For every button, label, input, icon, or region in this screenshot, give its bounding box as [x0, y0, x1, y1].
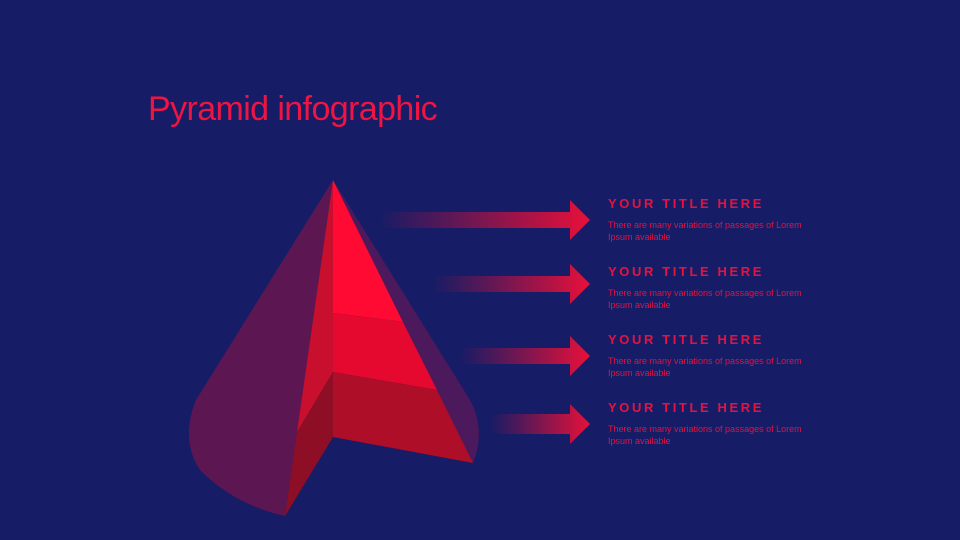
- item 2 text: There are many variations of passages of Lorem Ipsum available: [608, 288, 802, 310]
- title: Pyramid infographic: [148, 90, 437, 128]
- item 2 title: YOUR TITLE HERE: [608, 264, 764, 279]
- arrow 4: [490, 404, 590, 444]
- arrow 1: [378, 200, 590, 240]
- pyramid right face bands: [333, 180, 473, 463]
- item 4 text: There are many variations of passages of Lorem Ipsum available: [608, 424, 802, 446]
- item 3 text: There are many variations of passages of Lorem Ipsum available: [608, 356, 802, 378]
- cone shadow: [189, 180, 479, 516]
- item 1 title: YOUR TITLE HERE: [608, 196, 764, 211]
- arrow 2: [432, 264, 590, 304]
- arrow 3: [460, 336, 590, 376]
- item 1 text: There are many variations of passages of Lorem Ipsum available: [608, 220, 802, 242]
- item 3 title: YOUR TITLE HERE: [608, 332, 764, 347]
- pyramid left face: [285, 180, 333, 516]
- item 4 title: YOUR TITLE HERE: [608, 400, 764, 415]
